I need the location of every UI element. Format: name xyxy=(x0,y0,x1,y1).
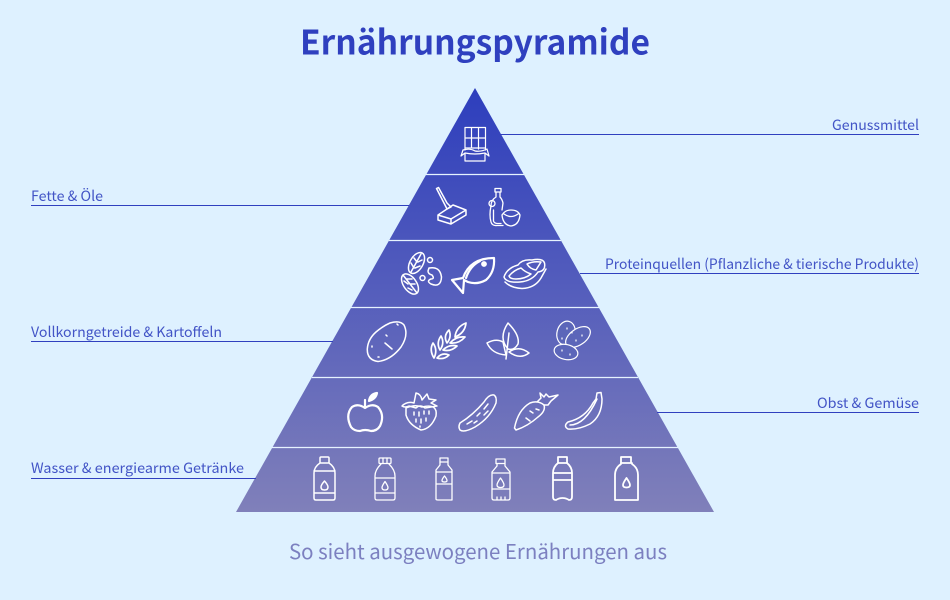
icon: nuts xyxy=(398,250,442,297)
label: Proteinquellen: Proteinquellen (Pflanzliche & tierische Produkte) xyxy=(605,254,919,274)
icon: bottle 2 xyxy=(375,458,395,500)
label: Vollkorngetreide: Vollkorngetreide & Kartoffeln xyxy=(31,322,222,342)
icon: carrot xyxy=(514,393,558,430)
icon: bottle 4 xyxy=(492,459,510,500)
label: Fette und Öle: Fette & Öle xyxy=(31,186,103,206)
icon: cucumber xyxy=(459,395,496,431)
icon: bottle 5 xyxy=(553,457,572,500)
icon: leaves xyxy=(487,323,529,359)
icon: bottle 1 xyxy=(314,457,335,500)
icon: sweet potatoes xyxy=(553,319,594,362)
label: Obst und Gemüse: Obst & Gemüse xyxy=(817,393,919,413)
icon: meat xyxy=(504,259,546,288)
subtitle: So sieht ausgewogene Ernährungen aus xyxy=(289,535,667,565)
label: Wasser: Wasser & energiearme Getränke xyxy=(31,458,244,478)
icon: oil and bowl xyxy=(489,188,520,226)
icon: chocolate xyxy=(461,128,489,161)
icon: bottle 3 xyxy=(436,458,452,500)
icon: fish xyxy=(452,258,494,293)
icons xyxy=(314,128,638,500)
icon: wheat xyxy=(431,323,466,359)
icon: butter xyxy=(436,188,466,224)
icon: apple xyxy=(348,393,382,431)
icon: potato xyxy=(367,322,406,362)
icon: strawberry xyxy=(402,393,437,430)
title: Ernährungspyramide xyxy=(300,16,650,64)
pyramid xyxy=(236,88,714,512)
icon: banana xyxy=(566,392,602,429)
icon: bottle 6 xyxy=(615,457,638,500)
label: Genussmittel: Genussmittel xyxy=(832,115,919,135)
